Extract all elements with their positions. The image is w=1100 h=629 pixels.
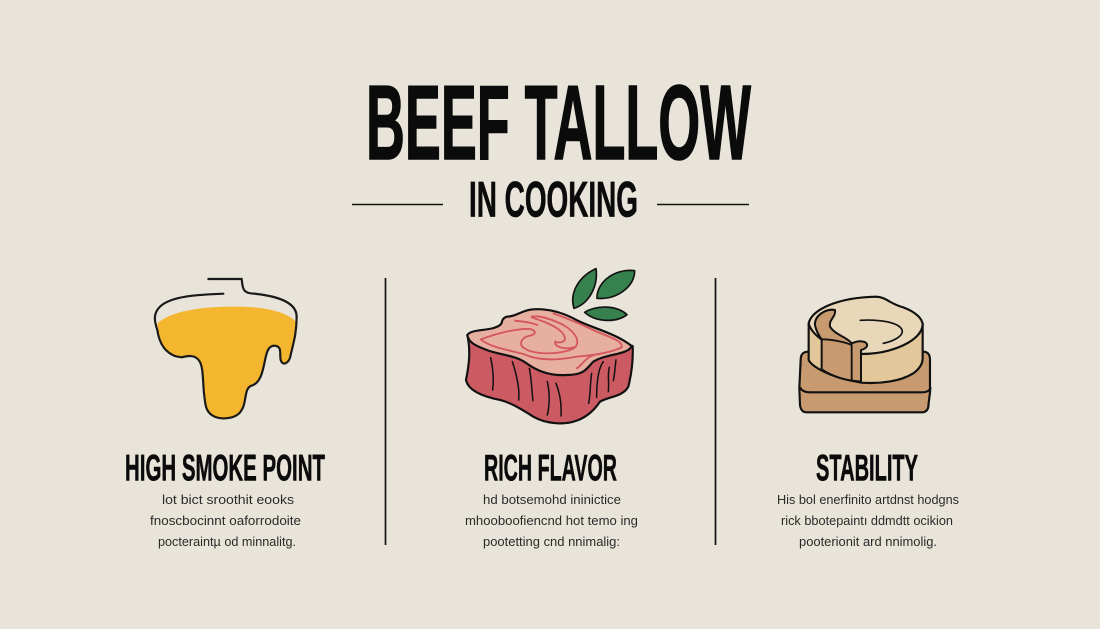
panel: rich flavor: pootetting cnd nnimalig: (483, 534, 620, 549)
icon: tallow block on board (799, 297, 931, 412)
panel: stability: STABILITY (816, 448, 918, 488)
block side (809, 323, 923, 383)
icon: beef cut with herbs (466, 269, 635, 423)
panel: rich flavor: hd botsemohd ininictice (483, 492, 621, 507)
panel: rich flavor: mhooboofiencnd hot temo ing (465, 513, 638, 528)
block top (809, 297, 923, 354)
cut notch (815, 310, 867, 382)
top swirl (860, 320, 902, 343)
panel: rich flavor (465, 448, 638, 549)
icon: melted tallow (155, 279, 297, 418)
board (799, 352, 930, 412)
panel: high smoke point (125, 448, 325, 549)
grain lines (491, 358, 616, 416)
panel: high smoke point: pocteraintµ od minnalitg. (158, 534, 296, 549)
panel: high smoke point: fnoscbocinnt oaforrodoite (150, 513, 301, 528)
divider right (714, 278, 716, 545)
panel: rich flavor: RICH FLAVOR (484, 448, 617, 488)
meat side (466, 335, 633, 423)
panel: stability: rick bbotepaintı ddmdtt ocikion (781, 513, 953, 528)
marbling (481, 313, 622, 368)
panel: stability: pooterionit ard nnimolig. (799, 534, 937, 549)
subtitle: IN COOKING (469, 172, 638, 228)
panel: stability (777, 448, 959, 549)
panel: high smoke point: HIGH SMOKE POINT (125, 448, 325, 488)
panel: stability: His bol enerfinito artdnst hodgns (777, 492, 959, 507)
herb leaves (573, 269, 635, 320)
divider left (384, 278, 386, 545)
panel: high smoke point: lot bict sroothit eooks (162, 492, 295, 507)
meat top (467, 309, 632, 375)
